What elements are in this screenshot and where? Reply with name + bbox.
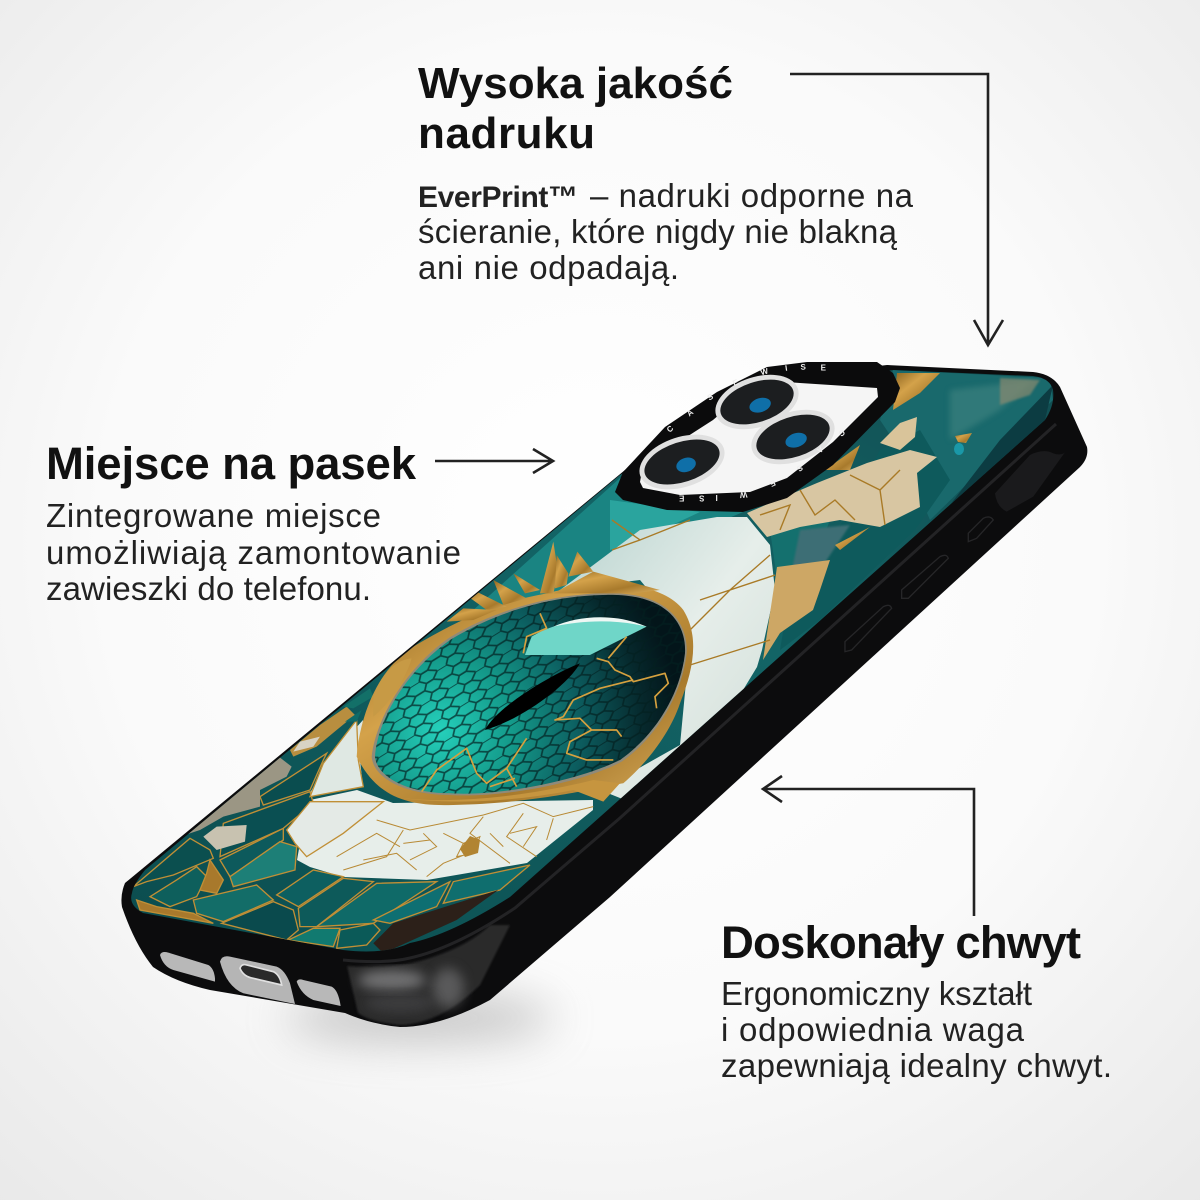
body text: ani nie odpadają. (418, 249, 679, 286)
callout: grip (721, 776, 1112, 1084)
printed back artwork (120, 360, 1070, 960)
body text: zapewniają idealny chwyt. (721, 1047, 1112, 1084)
charging port (220, 956, 295, 1004)
side edge highlight (343, 424, 1056, 962)
marble patch around eye (560, 517, 775, 800)
artwork base (120, 360, 1070, 960)
heading: Doskonały chwyt (721, 917, 1081, 968)
callout: strap slot (46, 438, 553, 607)
button: action (968, 517, 993, 542)
teal band above eye (474, 478, 744, 610)
body text: Ergonomiczny kształt (721, 975, 1032, 1012)
ring lettering: S (800, 363, 807, 372)
heading (418, 59, 733, 158)
silver and gold scraps along left edge (180, 688, 373, 850)
pupil (485, 663, 580, 730)
ring lettering: C (836, 428, 847, 438)
phone shadow (285, 994, 555, 1042)
body text: i odpowiednia waga (721, 1011, 1025, 1048)
body text: Zintegrowane miejsce (46, 497, 381, 534)
gold veins top (612, 470, 900, 665)
ring lettering: I (716, 493, 718, 502)
body text: EverPrint™ (418, 181, 578, 214)
body text: umożliwiają zamontowanie (46, 534, 461, 571)
lower marble (287, 790, 593, 880)
eye gold ring (357, 585, 693, 805)
body text: zawieszki do telefonu. (46, 570, 371, 607)
arrow: to top of phone (790, 74, 1003, 345)
camera window (640, 380, 878, 495)
kintsugi cracks in eye (422, 613, 668, 792)
lens left (632, 425, 732, 499)
ring lettering: S (698, 494, 704, 503)
callout: print quality (418, 59, 1003, 345)
crackle lines on white marble (337, 803, 593, 877)
ring lettering: S (706, 392, 716, 402)
lower gold lid (390, 780, 620, 802)
gold flake patches (747, 373, 972, 660)
arrow: to camera corner (435, 449, 553, 473)
speaker right (297, 979, 341, 1006)
body text (46, 497, 461, 607)
button: volume up (902, 555, 948, 598)
case body (121, 365, 1087, 1027)
ring lettering: E (821, 364, 827, 373)
eye highlight (525, 620, 647, 655)
heading: Miejsce na pasek (46, 438, 417, 489)
iris (375, 595, 685, 794)
ring lettering: S (794, 463, 805, 474)
bottom ports (160, 952, 341, 1006)
ring lettering (665, 363, 847, 503)
ring lettering: W (760, 366, 770, 377)
speaker left (160, 952, 215, 982)
body text (721, 975, 1112, 1084)
body text (418, 177, 914, 286)
gold swirl left (378, 658, 412, 685)
water drop detail (954, 443, 964, 455)
eye gray rim (372, 593, 687, 795)
ring lettering: E (678, 494, 684, 503)
ring lettering: E (731, 377, 741, 388)
ring lettering: I (785, 364, 788, 373)
eye spikes (447, 542, 660, 622)
button: volume down (845, 605, 892, 652)
phone in case (120, 360, 1087, 1027)
ring lettering: W (739, 490, 748, 500)
body text: ścieranie, które nigdy nie blakną (418, 213, 898, 250)
body text: – nadruki odporne na (590, 177, 914, 214)
side buttons (845, 450, 1067, 652)
ring lettering: E (768, 478, 777, 489)
glossy bottom corner (347, 925, 510, 1025)
lens right (744, 400, 842, 474)
teal stained glass cells (133, 720, 530, 953)
ring lettering: A (685, 408, 695, 418)
heading: Wysoka jakość (418, 59, 733, 108)
iris scales (375, 595, 685, 794)
ring lettering: C (665, 424, 675, 434)
ring lettering: A (815, 444, 825, 455)
lens top (708, 365, 806, 439)
eye (357, 542, 693, 805)
heading: nadruku (418, 109, 595, 158)
camera bump frame (615, 362, 900, 512)
upper right teal marble (770, 370, 1053, 650)
arrow: to phone side (763, 776, 974, 916)
case vent shape (995, 450, 1067, 512)
camera module (615, 362, 900, 512)
